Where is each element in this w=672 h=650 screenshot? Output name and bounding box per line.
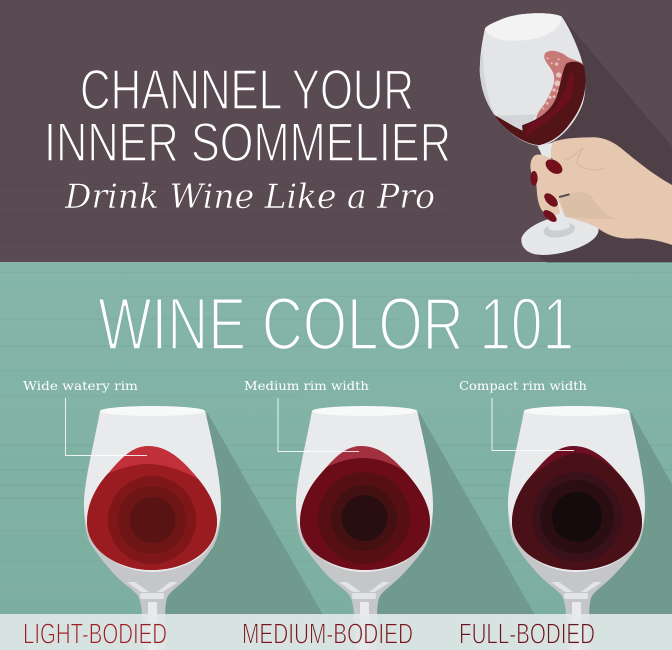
label: medium-bodied: MEDIUM-BODIED bbox=[242, 618, 413, 650]
label: full-bodied: FULL-BODIED bbox=[459, 618, 595, 650]
callout: medium rim width bbox=[244, 379, 369, 452]
glass bowl bbox=[480, 13, 585, 146]
wine highlight bbox=[524, 70, 574, 137]
dark header banner bbox=[0, 0, 672, 262]
teal wood background bbox=[0, 262, 672, 650]
glass: full-bodied bbox=[505, 406, 650, 650]
bowl side shade bbox=[480, 50, 540, 146]
foot center bbox=[542, 221, 576, 239]
title: CHANNEL YOUR bbox=[80, 58, 414, 122]
callout: compact rim width: Compact rim width bbox=[459, 379, 587, 393]
long shadows of the glasses bbox=[160, 412, 672, 615]
callout: compact rim width bbox=[459, 379, 587, 450]
title bbox=[44, 58, 451, 173]
glass: light-bodied bbox=[80, 406, 225, 650]
foam bubbles bbox=[542, 57, 561, 109]
callout: wide watery rim: Wide watery rim bbox=[23, 379, 139, 393]
illustration: hand holding swirling wine glass bbox=[480, 13, 672, 262]
nails bbox=[530, 156, 565, 224]
foam bbox=[536, 51, 583, 122]
label: light-bodied: LIGHT-BODIED bbox=[23, 618, 167, 650]
bottom label band bbox=[0, 614, 672, 650]
glass foot bbox=[521, 213, 599, 255]
hand bbox=[530, 137, 672, 245]
glass stem bbox=[537, 142, 570, 231]
callout: medium rim width: Medium rim width bbox=[244, 379, 369, 393]
bowl rim bbox=[485, 13, 562, 41]
glass shadow bbox=[530, 17, 672, 262]
callout: wide watery rim bbox=[23, 379, 147, 456]
title: INNER SOMMELIER bbox=[44, 111, 451, 173]
swirling wine bbox=[494, 62, 586, 145]
subtitle: Drink Wine Like a Pro bbox=[64, 177, 435, 217]
thumb crease bbox=[565, 148, 604, 170]
hand fold shading bbox=[560, 192, 616, 219]
ring bbox=[559, 193, 570, 198]
glass: medium-bodied bbox=[293, 406, 438, 650]
